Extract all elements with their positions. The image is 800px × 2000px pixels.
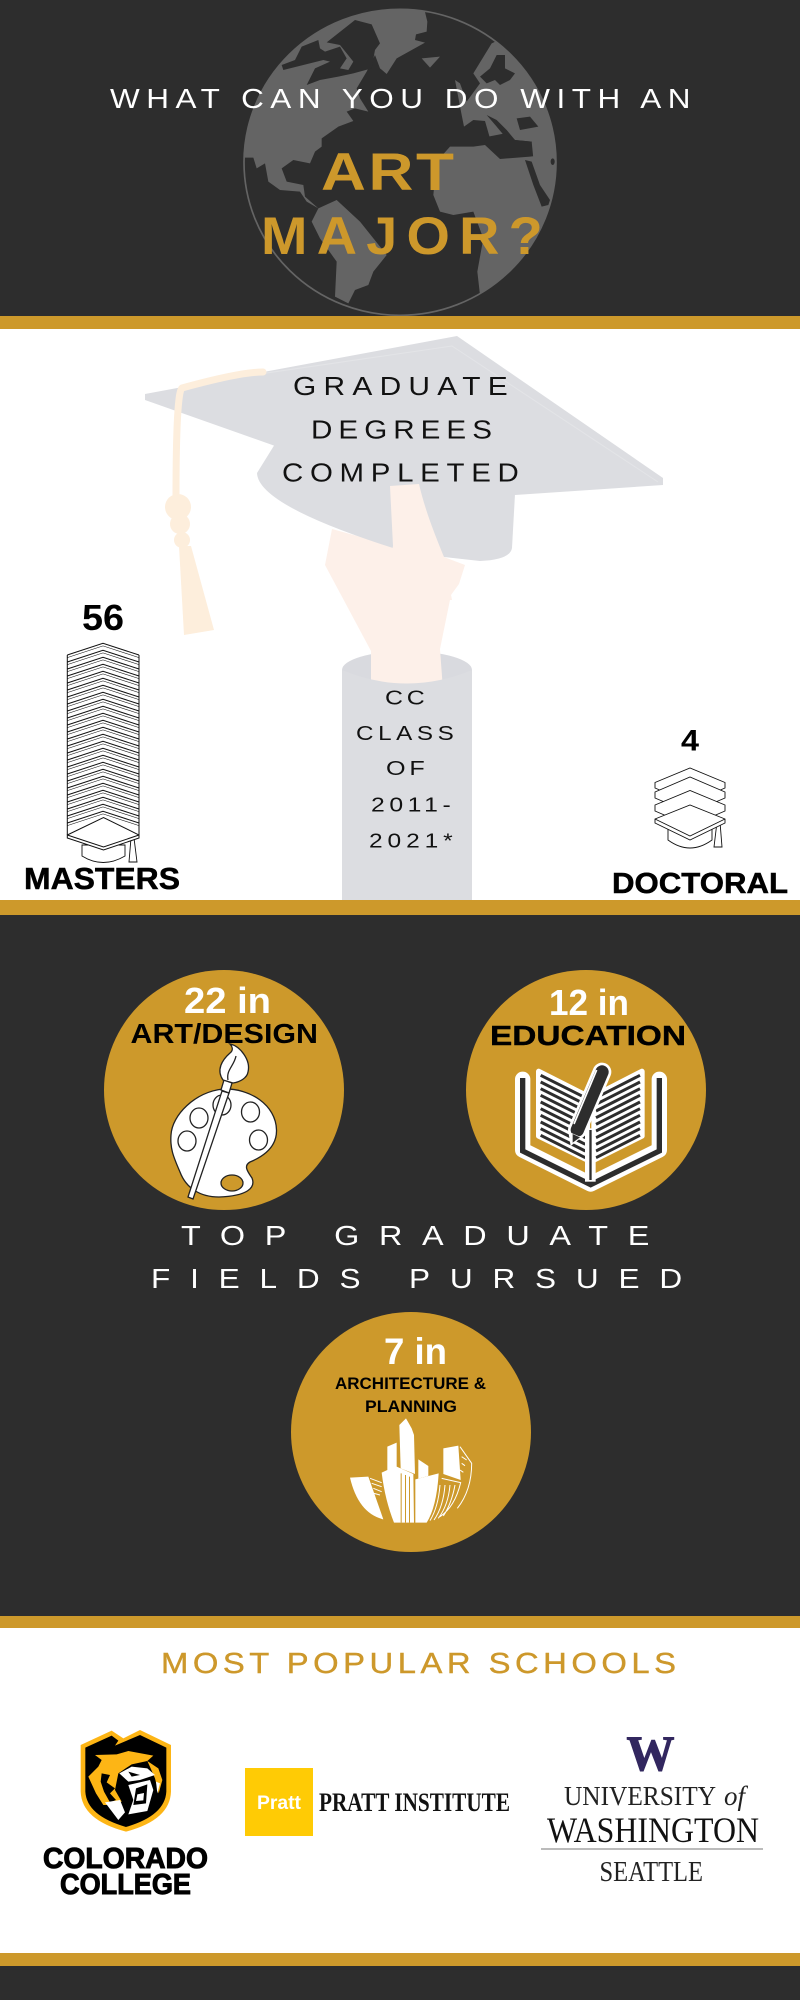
heading: top graduate fields pursued [151,1220,702,1294]
stat: 4: 4 [681,724,699,758]
logo: university of washington [541,1725,763,1888]
logo: university of washington: SEATTLE [600,1856,703,1888]
text: cc class of 2011-2021: OF [386,758,428,780]
icon: doctoral cap stack [655,768,725,848]
text: cc class of 2011-2021 [356,688,458,852]
field: architecture and planning: 7 in [384,1331,447,1372]
logo: pratt institute [245,1768,510,1836]
icon: sleeve, hand and graduation cap [145,336,663,900]
stat: 56: 56 [82,597,124,638]
label: masters: MASTERS [24,861,180,896]
text: cc class of 2011-2021: 2011- [371,794,455,816]
field: architecture and planning: PLANNING [365,1398,457,1416]
panel: graduate degrees [0,329,800,900]
divider band [0,1616,800,1628]
divider band [0,900,800,915]
field: art and design [104,970,344,1210]
logo: colorado college [43,1730,208,1901]
divider band [0,1953,800,1966]
text: cc class of 2011-2021: 2021* [369,830,458,852]
field: architecture and planning: ARCHITECTURE & [335,1375,486,1393]
field: education: 12 in [549,982,629,1023]
logo: university of washington: UNIVERSITY [564,1781,716,1811]
divider band [0,316,800,329]
panel: header [0,0,800,316]
icon: open book and pen [523,1070,659,1185]
icon: palette and brush [171,1044,277,1199]
heading: graduate degrees completed [282,371,526,488]
panel: most popular schools [0,1628,800,1953]
logo: pratt institute: Pratt [257,1793,302,1814]
panel: top graduate fields [0,915,800,1616]
logo: university of washington: of [724,1781,748,1811]
heading: major: MAJOR? [261,207,552,266]
label: doctoral: DOCTORAL [612,868,788,900]
field: art and design: ART/DESIGN [130,1018,318,1049]
heading: graduate degrees completed: GRADUATE [293,371,515,401]
logo: university of washington: W [626,1725,674,1781]
icon: masters cap stack [67,643,139,862]
heading: art: ART [321,143,456,202]
field: education [466,970,706,1210]
heading: graduate degrees completed: DEGREES [311,414,498,444]
field: education: EDUCATION [490,1020,686,1051]
logo: pratt institute: PRATT INSTITUTE [319,1788,510,1817]
icon: globe [240,5,573,315]
text: cc class of 2011-2021: CC [385,688,428,710]
heading: top graduate fields pursued: TOP GRADUATE [181,1220,669,1251]
logo: university of washington: WASHINGTON [547,1810,759,1850]
icon: city buildings [350,1418,472,1523]
heading: most popular schools: MOST POPULAR SCHOOLS [161,1648,680,1680]
heading: what can you do with an: WHAT CAN YOU DO WITH AN [110,83,697,114]
heading: top graduate fields pursued: FIELDS PURSUED [151,1263,702,1294]
heading: graduate degrees completed: COMPLETED [282,458,526,488]
panel: footer [0,1966,800,2000]
logo: colorado college: COLLEGE [60,1869,191,1901]
icon: tiger shield [81,1730,171,1832]
text: cc class of 2011-2021: CLASS [356,723,458,745]
logo: colorado college: COLORADO [43,1843,208,1875]
field: architecture and planning [291,1312,531,1552]
field: art and design: 22 in [184,980,271,1021]
